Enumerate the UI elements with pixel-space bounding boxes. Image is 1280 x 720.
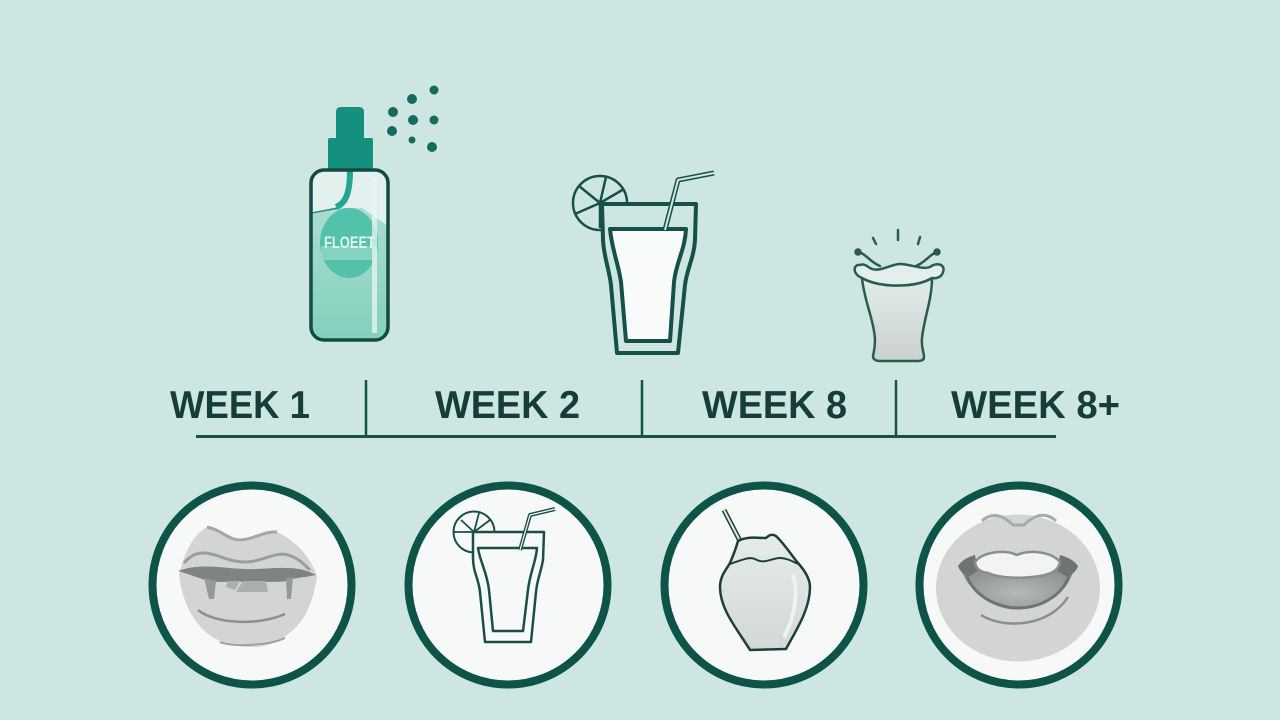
circle badge xyxy=(152,486,352,684)
icon: coconut xyxy=(720,510,810,650)
glass body xyxy=(862,278,932,361)
label: week 2: WEEK 2 xyxy=(435,384,580,427)
glass inner xyxy=(610,229,686,341)
icon: drink glass xyxy=(454,509,555,642)
splash crest xyxy=(855,264,944,286)
straw xyxy=(665,173,714,230)
splash rays xyxy=(873,230,920,244)
icon: healthy lips xyxy=(936,514,1100,662)
label: week 8: WEEK 8 xyxy=(702,384,847,427)
circle badge xyxy=(920,486,1118,684)
icon: drink glass with lemon xyxy=(573,173,714,353)
splash droplets xyxy=(859,252,937,266)
circle badge xyxy=(408,486,608,684)
timeline xyxy=(170,380,1120,436)
bottle label: FLOEET xyxy=(324,233,375,252)
panel: healthy smile xyxy=(920,486,1118,684)
circle badge xyxy=(664,486,864,684)
panel: drink in circle xyxy=(408,486,608,684)
spray droplets xyxy=(387,86,438,152)
panel: dry cracked lips xyxy=(152,486,352,684)
label: week 1: WEEK 1 xyxy=(170,384,310,427)
label: week 8+: WEEK 8+ xyxy=(951,384,1120,427)
icon: cracked lips xyxy=(178,527,317,647)
panel: coconut drink xyxy=(664,486,864,684)
timeline rule xyxy=(196,380,1056,436)
icon: spray bottle xyxy=(311,86,438,340)
icon: splashing glass xyxy=(855,230,944,361)
lemon slice xyxy=(573,176,627,230)
glass outer xyxy=(602,204,696,353)
bottle body xyxy=(311,170,388,340)
bottle cap xyxy=(328,107,373,169)
